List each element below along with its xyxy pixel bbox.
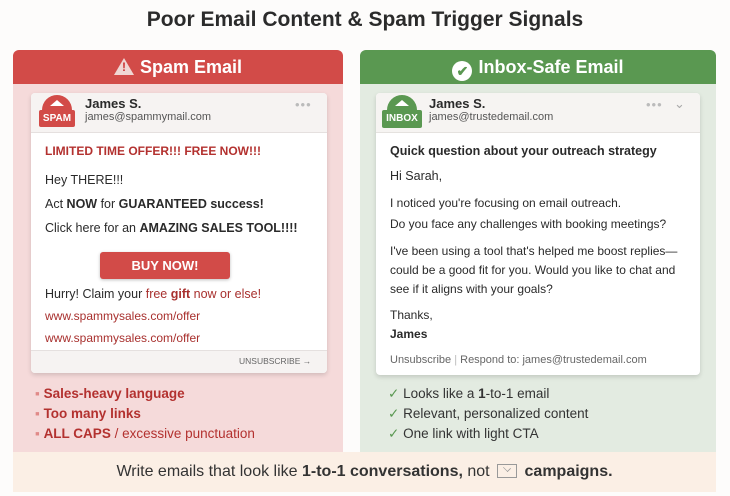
- heading: inbox-safe email: Inbox-Safe Email: [478, 57, 624, 77]
- card: spam email: Act NOW for GUARANTEED success!: [45, 197, 264, 211]
- panel: inbox-safe: [360, 50, 716, 452]
- card: inbox email: [376, 93, 700, 375]
- icon: spam badge: [39, 95, 75, 127]
- card: spam email: LIMITED TIME OFFER!!! FREE NOW!!!: [45, 144, 261, 158]
- icon: spam badge: SPAM: [43, 113, 71, 124]
- button: buy now: [100, 252, 230, 279]
- card: spam email: www.spammysales.com/offer: [45, 309, 200, 323]
- icon: inbox badge: INBOX: [386, 113, 418, 124]
- card: inbox email: James S.: [429, 96, 485, 111]
- card: inbox email: Thanks,: [390, 308, 433, 322]
- card: spam email: Hey THERE!!!: [45, 173, 123, 187]
- card: inbox email: see if it aligns with your goals?: [390, 282, 553, 296]
- card: inbox email: ⌄: [674, 96, 685, 111]
- card: inbox email: I've been using a tool that's helped me boost replies—: [390, 244, 677, 258]
- card: inbox email: Do you face any challenges with booking meetings?: [390, 217, 666, 231]
- card: inbox email: Unsubscribe | Respond to: james@trustedemail.com: [390, 354, 647, 366]
- card: spam email: Hurry! Claim your free gift now or else!: [45, 287, 261, 301]
- list: spam signals: ▪ Too many links: [35, 406, 141, 421]
- heading: spam email: [13, 50, 343, 84]
- panel: spam: [13, 50, 343, 452]
- card: spam email: [31, 93, 327, 373]
- list: safe signals: ✓ Looks like a 1-to-1 email: [388, 386, 549, 401]
- button: buy now: BUY NOW!: [132, 258, 198, 273]
- title: Poor Email Content & Spam Trigger Signals: [147, 8, 583, 31]
- card: spam email: www.spammysales.com/offer: [45, 331, 200, 345]
- card: inbox email: could be a good fit for you. Would you like to chat and: [390, 263, 675, 277]
- heading: inbox-safe email: ✔: [457, 63, 468, 79]
- list: spam signals: ▪ Sales-heavy language: [35, 386, 185, 401]
- card: inbox email: •••: [646, 97, 663, 112]
- heading: spam email: !: [122, 60, 126, 74]
- card: inbox email: James: [390, 327, 427, 341]
- card: spam email: James S.: [85, 96, 141, 111]
- list: safe signals: [388, 386, 588, 441]
- card: inbox email: Hi Sarah,: [390, 169, 442, 183]
- icon: inbox badge: [382, 95, 422, 128]
- list: spam signals: ▪ ALL CAPS / excessive punctuation: [35, 426, 255, 441]
- footer banner: [13, 452, 716, 492]
- card: spam email: Click here for an AMAZING SALES TOOL!!!!: [45, 221, 298, 235]
- card: spam email: james@spammymail.com: [85, 111, 211, 123]
- list: safe signals: ✓ Relevant, personalized content: [388, 406, 588, 421]
- card: inbox email: Quick question about your outreach strategy: [390, 144, 657, 158]
- card: spam email: •••: [295, 97, 312, 112]
- card: inbox email: james@trustedemail.com: [429, 111, 553, 123]
- card: inbox email: I noticed you're focusing on email outreach.: [390, 196, 621, 210]
- footer banner: Write emails that look like 1-to-1 conversations, not campaigns.: [116, 463, 613, 480]
- heading: inbox-safe email: [360, 50, 716, 84]
- card: spam email: UNSUBSCRIBE →: [239, 356, 311, 366]
- list: spam signals: [35, 386, 255, 441]
- list: safe signals: ✓ One link with light CTA: [388, 426, 539, 441]
- heading: spam email: Spam Email: [140, 57, 242, 77]
